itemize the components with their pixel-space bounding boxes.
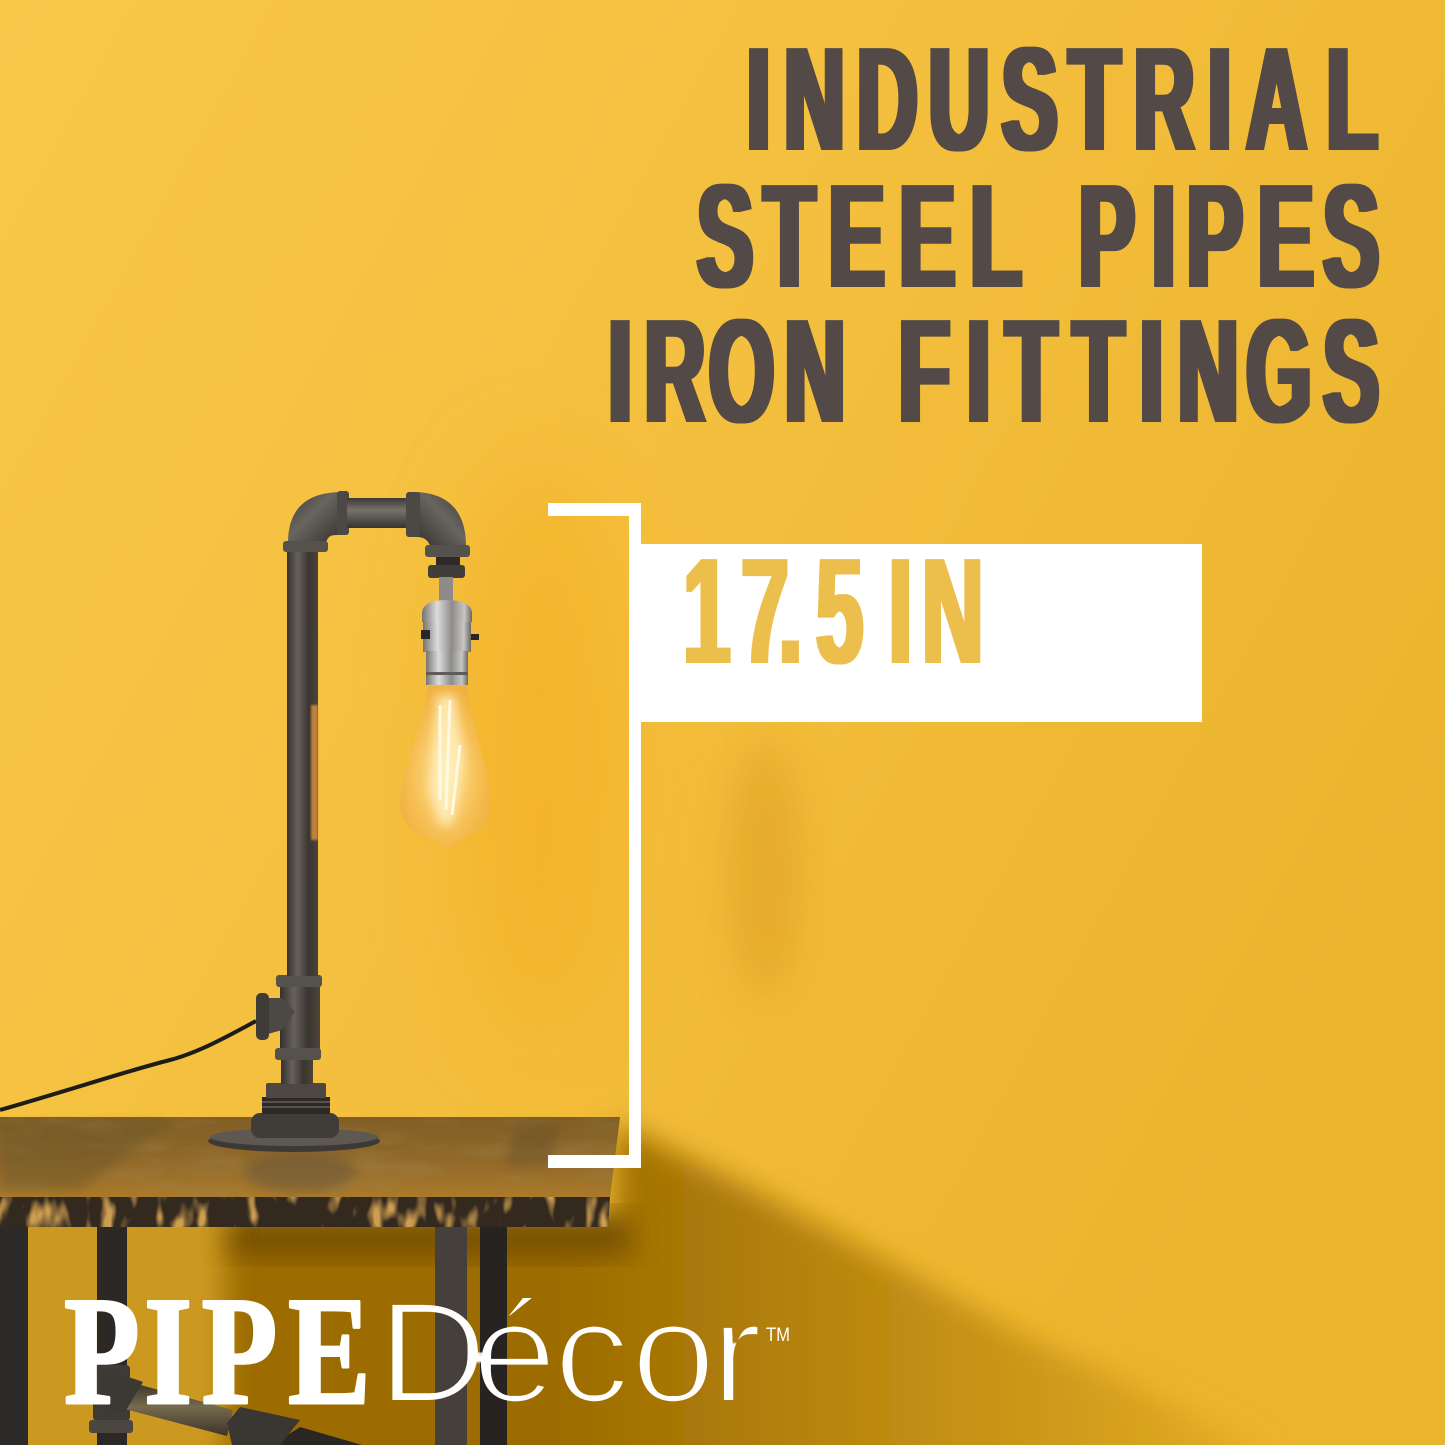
glow on pipe xyxy=(311,705,318,840)
dimension label xyxy=(640,526,1202,722)
horizontal nipple xyxy=(347,498,407,528)
table edge xyxy=(0,1197,610,1227)
lamp xyxy=(0,491,491,1152)
silver socket xyxy=(421,577,479,685)
dimension value: 17.5 IN xyxy=(683,526,984,695)
headline line 3: IRON FITTINGS xyxy=(609,289,1379,454)
height bracket xyxy=(548,503,641,1168)
tee fitting xyxy=(256,975,322,1060)
table legs and lower frame xyxy=(0,1227,507,1445)
lamp base flange xyxy=(208,1060,380,1152)
edison bulb xyxy=(400,686,491,848)
trademark: TM xyxy=(766,1325,790,1346)
table top xyxy=(0,1117,620,1227)
right elbow xyxy=(406,492,470,578)
lamp cord xyxy=(0,1021,256,1110)
brand logo xyxy=(64,1266,790,1437)
left elbow xyxy=(283,491,349,552)
headline xyxy=(609,17,1379,454)
logo Décor: Décor xyxy=(378,1272,762,1433)
headline line 1: INDUSTRIAL xyxy=(747,17,1378,182)
headline line 2: STEEL PIPES xyxy=(697,154,1379,319)
logo PIPE: PIPE xyxy=(64,1266,371,1437)
vertical pipe xyxy=(287,552,318,976)
